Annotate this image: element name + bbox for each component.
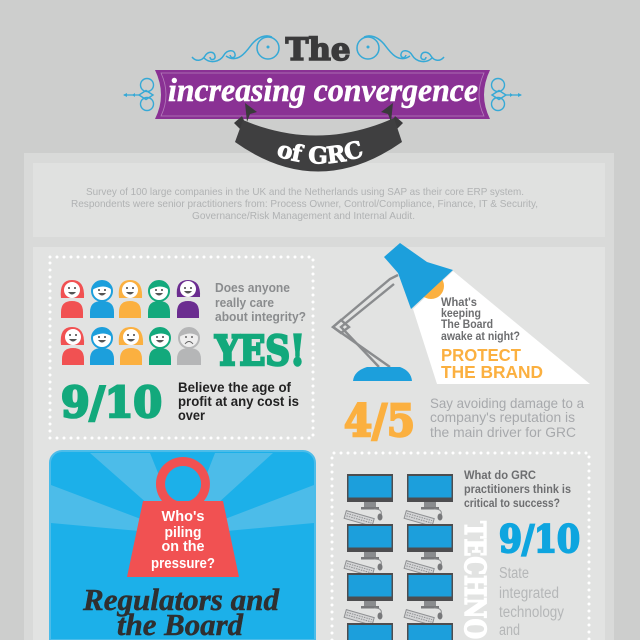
icon: weight: piling xyxy=(164,525,202,541)
panel: technology xyxy=(332,453,589,640)
icon group: computers xyxy=(344,474,453,640)
icon: weight: on the xyxy=(162,539,204,555)
text: say avoiding damage: company's reputation is xyxy=(430,409,575,425)
icon group: people row one xyxy=(61,280,200,318)
panel: integrity xyxy=(50,257,313,438)
panel: main content xyxy=(33,247,605,640)
text: say avoiding damage: Say avoiding damage to a xyxy=(430,395,584,411)
text: say avoiding damage: the main driver for GRC xyxy=(430,424,576,440)
stat: 9/10 blue: 9/10 xyxy=(499,517,580,561)
banner: increasing convergence: increasing convergence xyxy=(168,73,478,109)
text: what do GRC practitioners: What do GRC xyxy=(464,469,537,482)
ribbon: of GRC: of GRC xyxy=(278,140,362,164)
text: what's keeping the board: keeping xyxy=(441,306,481,320)
icon group: people row two xyxy=(61,327,201,365)
sun rays xyxy=(51,453,314,535)
text: state integrated technology: and xyxy=(499,622,520,639)
panel: survey intro: Governance/Risk Management and Internal Audit. xyxy=(192,211,415,222)
text: does anyone care: about integrity? xyxy=(215,309,306,324)
panel: outer content sheet xyxy=(24,153,614,640)
text: protect the brand: PROTECT xyxy=(441,345,521,365)
text: regulators and the board: Regulators and xyxy=(82,582,279,617)
text: what's keeping the board: awake at night? xyxy=(441,329,520,343)
ribbon: of GRC xyxy=(234,103,403,172)
text: what do GRC practitioners: critical to success? xyxy=(464,497,560,510)
text: what's keeping the board: The Board xyxy=(441,317,493,331)
panel: survey intro: Survey of 100 large companies in the UK and the Netherlands using SAP as their core ERP system. xyxy=(86,187,524,198)
light beam xyxy=(413,271,590,384)
text: state integrated technology: integrated xyxy=(499,585,559,602)
text: believe the age: over xyxy=(178,408,206,423)
text: YES: YES! xyxy=(214,327,305,375)
icon: lamp xyxy=(333,243,453,381)
text: does anyone care: really care xyxy=(215,295,274,310)
stat: 4/5: 4/5 xyxy=(344,396,415,447)
title: The: The xyxy=(286,32,350,68)
text: what do GRC practitioners: practitioners think is xyxy=(464,483,571,496)
panel: survey intro xyxy=(33,163,605,237)
icon: weight: pressure? xyxy=(151,556,215,572)
text: does anyone care: Does anyone xyxy=(215,280,290,295)
text: believe the age: profit at any cost is xyxy=(178,394,299,409)
text: what's keeping the board: What's xyxy=(441,295,477,309)
panel: survey intro: Respondents were senior practitioners from: Process Owner, Control/Compliance, Finance, IT & Security, xyxy=(71,199,538,210)
icon: right flourish xyxy=(357,36,444,62)
text: state integrated technology: technology xyxy=(499,604,564,621)
icon: right banner ornament xyxy=(492,78,522,110)
text: protect the brand: THE BRAND xyxy=(441,362,543,382)
icon: weight xyxy=(127,457,239,577)
icon: left banner ornament xyxy=(123,78,154,110)
icon: left flourish xyxy=(192,36,279,62)
panel: lamp xyxy=(333,243,590,447)
panel: pressure xyxy=(50,451,315,640)
text: believe the age: Believe the age of xyxy=(178,380,292,395)
stat: 9/10 green: 9/10 xyxy=(61,378,162,427)
icon: weight: Who's xyxy=(162,509,204,525)
text: state integrated technology: State xyxy=(499,565,529,582)
